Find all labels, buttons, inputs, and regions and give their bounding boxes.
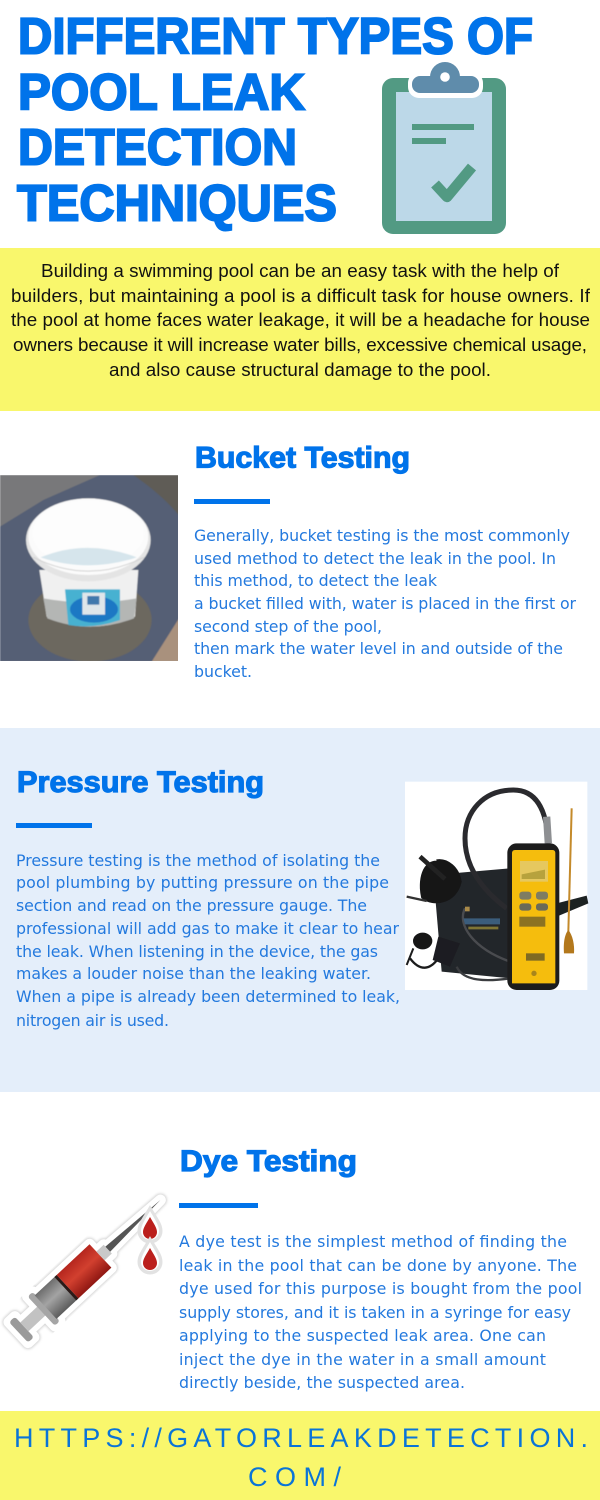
website url: HTTPS://GATORLEAKDETECTION.: [14, 1423, 588, 1453]
underline: [194, 499, 270, 504]
body text: bucket testing: second step of the pool,: [194, 617, 382, 636]
body text: pressure testing: nitrogen air is used.: [16, 1011, 169, 1030]
body text: dye testing: [179, 1232, 582, 1392]
body text: bucket testing: bucket.: [194, 662, 252, 681]
body text: dye testing: A dye test is the simplest method of finding the: [179, 1232, 567, 1251]
body text: dye testing: leak in the pool that can be done by anyone. The: [179, 1256, 577, 1275]
body text: pressure testing: the leak. When listening in the device, the gas: [16, 942, 378, 961]
body text: pressure testing: section and read on the pressure gauge. The: [16, 896, 367, 915]
introduction text: Building a swimming pool can be an easy task with the help of: [41, 260, 560, 281]
icon: clipboard with check mark: [382, 62, 506, 234]
body text: pressure testing: professional will add gas to make it clear to hear: [16, 919, 400, 938]
panel: introduction: [0, 248, 600, 411]
introduction text: builders, but maintaining a pool is a difficult task for house owners. If: [11, 285, 591, 306]
title: [17, 8, 533, 232]
underline: [179, 1203, 258, 1208]
website url: [14, 1423, 588, 1492]
body text: bucket testing: Generally, bucket testing is the most commonly: [194, 526, 570, 545]
title: POOL LEAK: [18, 64, 305, 120]
panel: dye testing: [5, 1145, 582, 1392]
title: DETECTION: [18, 118, 297, 176]
underline: [16, 823, 92, 828]
website url: COM/: [248, 1462, 341, 1492]
photo: bucket of water on pool step: [0, 475, 180, 662]
heading: dye testing: Dye Testing: [180, 1145, 357, 1178]
heading: bucket testing: Bucket Testing: [195, 442, 410, 474]
body text: pressure testing: When a pipe is already been determined to leak,: [16, 987, 400, 1006]
introduction text: the pool at home faces water leakage, it will be a headache for house: [11, 309, 590, 330]
introduction text: and also cause structural damage to the pool.: [109, 359, 491, 380]
panel: footer website link: [0, 1411, 600, 1500]
body text: bucket testing: used method to detect the leak in the pool. In: [194, 549, 556, 568]
body text: bucket testing: [194, 526, 576, 681]
icon: syringe with dripping drops: [5, 1185, 174, 1347]
body text: pressure testing: [16, 851, 400, 1030]
panel: pressure testing: [0, 728, 600, 1092]
introduction text: owners because it will increase water bills, excessive chemical usage,: [13, 334, 587, 355]
body text: pressure testing: pool plumbing by putting pressure on the pipe: [16, 873, 389, 892]
panel: bucket testing: [0, 442, 576, 681]
body text: bucket testing: then mark the water level in and outside of the: [194, 639, 563, 658]
heading: pressure testing: Pressure Testing: [17, 766, 264, 799]
title: DIFFERENT TYPES OF: [18, 8, 533, 64]
body text: dye testing: dye used for this purpose is bought from the pool: [179, 1279, 582, 1298]
body text: dye testing: applying to the suspected leak area. One can: [179, 1326, 546, 1345]
body text: pressure testing: Pressure testing is the method of isolating the: [16, 851, 380, 870]
title: TECHNIQUES: [17, 174, 337, 232]
photo: electronic leak detector kit: [405, 782, 588, 990]
introduction text: [11, 260, 591, 380]
body text: pressure testing: makes a louder noise than the leaking water.: [16, 964, 371, 983]
body text: dye testing: directly beside, the suspected area.: [179, 1373, 465, 1392]
body text: bucket testing: a bucket filled with, water is placed in the first or: [194, 594, 576, 613]
body text: dye testing: supply stores, and it is taken in a syringe for easy: [179, 1303, 571, 1322]
body text: dye testing: inject the dye in the water in a small amount: [179, 1350, 546, 1369]
body text: bucket testing: this method, to detect the leak: [194, 571, 438, 590]
